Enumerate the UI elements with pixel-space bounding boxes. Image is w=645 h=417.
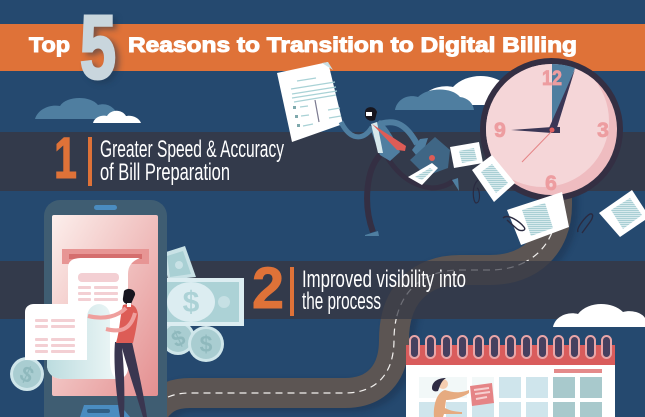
- runner arm back: [380, 122, 417, 144]
- man legs: [114, 342, 147, 417]
- big numeral 5: 5: [84, 1, 120, 101]
- title: Reasons to Transition to Digital Billing: [128, 34, 577, 57]
- clock wedge: [552, 64, 575, 130]
- runner tie: [372, 124, 406, 151]
- reason 2 text: Improved visibility into: [302, 266, 466, 293]
- reason 1 numeral: 1: [54, 126, 77, 191]
- receipt scroll: [47, 258, 140, 379]
- flying paper: small: [450, 142, 483, 168]
- runner legs: [367, 155, 380, 232]
- man shirt: [116, 304, 138, 343]
- runner jacket: [370, 120, 400, 161]
- reason 2 text: the process: [302, 288, 381, 315]
- coin left of phone: $: [16, 361, 38, 388]
- reason 1 text: [100, 136, 284, 186]
- flying paper: diagonal: [472, 155, 515, 202]
- paper clip left: [473, 180, 480, 203]
- man in red shirt: [88, 289, 147, 417]
- calendar: [406, 336, 615, 417]
- man arms: [88, 308, 126, 318]
- sticky note: [470, 383, 494, 406]
- man head: [123, 289, 135, 304]
- calendar grid: [419, 377, 602, 417]
- invoice held by runner: [277, 62, 343, 142]
- money: small rotated bill: [163, 246, 196, 280]
- cloud: right white: [553, 304, 645, 327]
- coins beside phone: $: [167, 325, 189, 352]
- paper clip right: [578, 214, 593, 233]
- clock numerals: 6: [545, 172, 557, 195]
- receipt slot: [62, 249, 149, 264]
- header band: [0, 24, 645, 71]
- paper clip middle: [503, 217, 525, 231]
- runner shoes: [365, 231, 379, 236]
- dark band: reason 2: [0, 261, 645, 319]
- money: large bill: $: [183, 286, 200, 319]
- clock numerals: 9: [494, 119, 506, 142]
- dark band: reason 1: [0, 132, 645, 191]
- cloud: centre white and blue: [395, 76, 505, 110]
- coins beside phone: $: [200, 331, 213, 357]
- big numeral 5: 5: [80, 0, 116, 98]
- reason 1 divider: [88, 137, 92, 186]
- phone home button: [80, 405, 130, 417]
- runner: [341, 107, 459, 236]
- clock: [477, 55, 623, 201]
- clock numerals: 12: [542, 67, 562, 90]
- road: [150, 190, 562, 417]
- coin left of phone: [10, 357, 44, 391]
- phone: [44, 200, 167, 417]
- flying paper: far right: [599, 190, 645, 237]
- road seen through second band: [381, 261, 551, 319]
- title: [29, 0, 577, 101]
- phone speaker: [94, 205, 117, 210]
- woman placing note: [432, 378, 494, 417]
- reason 2 text: [302, 266, 466, 315]
- money: large bill: [160, 278, 244, 326]
- runner head: [365, 107, 377, 121]
- document falling from briefcase: [408, 163, 438, 185]
- clock numerals: [494, 67, 609, 195]
- phone screen: [52, 215, 158, 396]
- reason 1 text: of Bill Preparation: [100, 159, 230, 186]
- flying paper: lower: [507, 192, 569, 245]
- reason 1 text: Greater Speed & Accuracy: [100, 136, 284, 163]
- title: Top: [29, 34, 70, 57]
- clock hands: [511, 69, 575, 162]
- receipt front sheet: [25, 304, 100, 360]
- cloud: left blue and white: [35, 98, 141, 123]
- reason 2 divider: [290, 267, 294, 316]
- clock numerals: 3: [597, 119, 609, 142]
- coins beside phone: [161, 321, 224, 362]
- briefcase: [412, 138, 428, 155]
- reason 2 numeral: 2: [252, 256, 284, 321]
- calendar rings: [410, 336, 611, 358]
